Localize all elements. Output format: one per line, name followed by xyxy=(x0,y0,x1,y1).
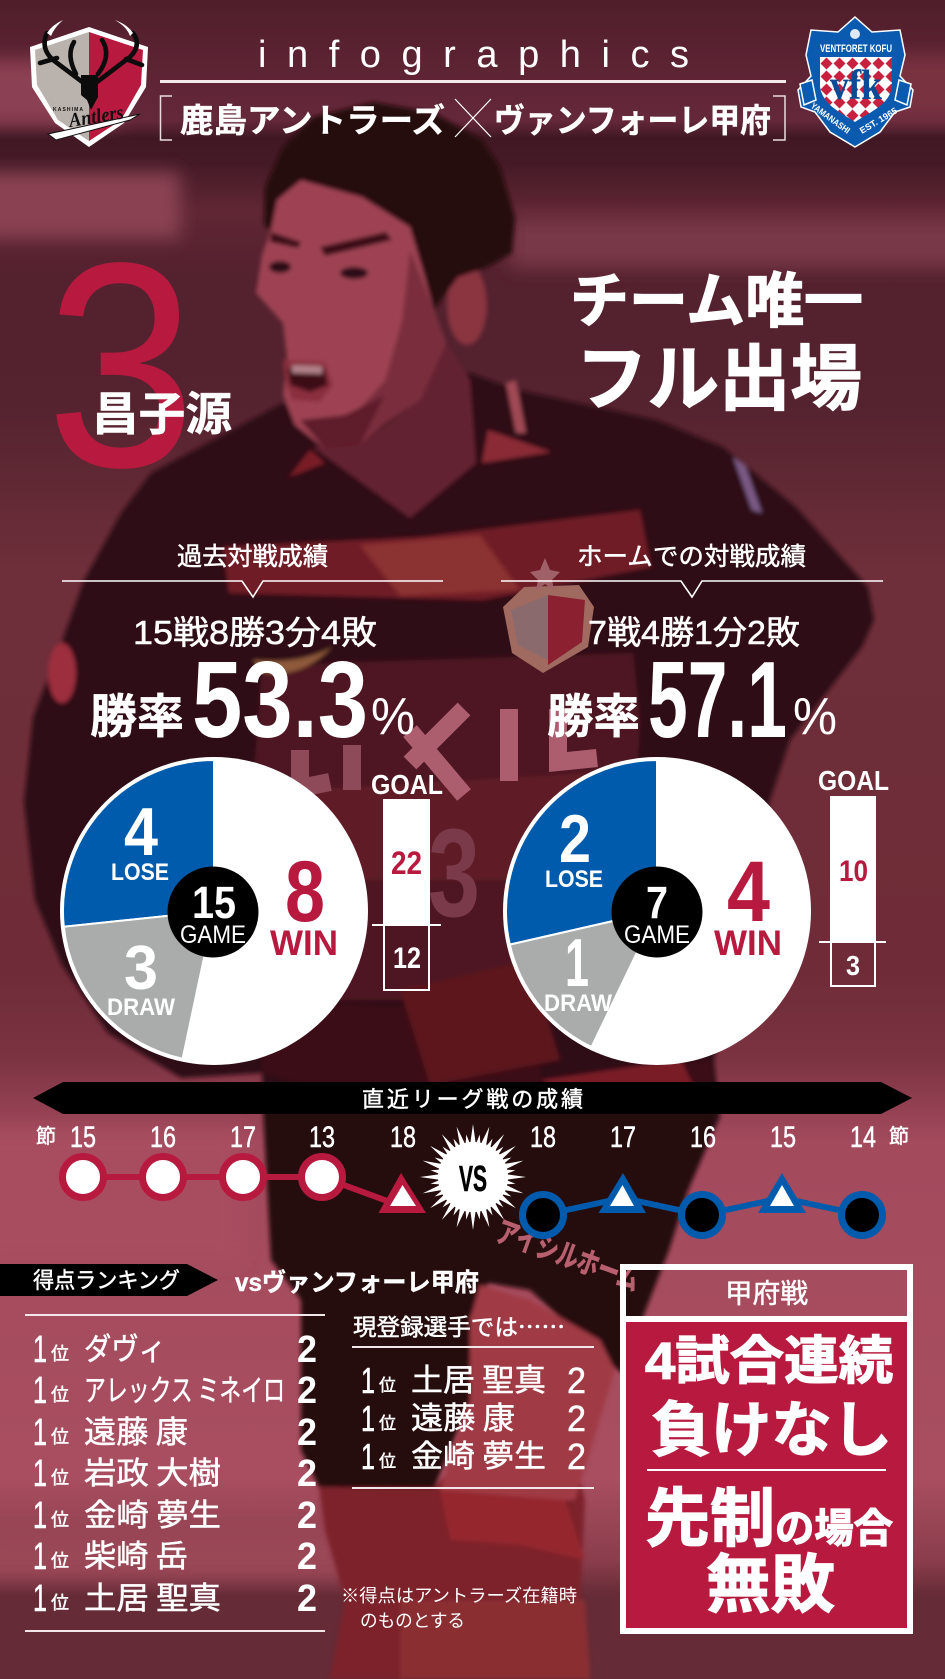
ranking table: 遠藤 康 xyxy=(84,1407,188,1452)
panel: current squad ranking xyxy=(341,1308,594,1633)
round numbers: Kofu: 14 xyxy=(850,1121,876,1154)
pie chart: 4 xyxy=(124,794,158,870)
callout stat two: 無敗 xyxy=(706,1549,835,1621)
pie chart: 15 xyxy=(192,877,236,928)
logo: Kashima Antlers crest xyxy=(30,20,148,147)
headline: フル出場 xyxy=(576,340,862,420)
win rate: 勝率 xyxy=(90,690,184,743)
player number 3: 3 xyxy=(46,202,196,528)
ranking table: ダヴィ xyxy=(84,1324,166,1369)
goal bar: 3 xyxy=(846,950,860,981)
pie chart: 4 xyxy=(727,844,770,940)
squad table: 土居 聖真 xyxy=(411,1355,546,1400)
title: infographics: infographics xyxy=(258,34,689,76)
ranking rule top xyxy=(25,1314,325,1316)
ranking table: 2 xyxy=(297,1329,317,1371)
goal bar: 10 xyxy=(839,855,868,888)
logo: Kashima Antlers crest: KASHIMA xyxy=(53,107,83,113)
goal bar: GOAL xyxy=(818,765,889,796)
callout stat two: 先制 xyxy=(645,1483,775,1555)
form banner xyxy=(33,1082,912,1114)
goal bar: GOAL xyxy=(371,769,443,800)
logo: Ventforet Kofu crest: YAMANASHI xyxy=(809,101,852,136)
footnote xyxy=(341,1582,577,1633)
round numbers: Antlers: 15 xyxy=(70,1121,96,1154)
squad table: 金崎 夢生 xyxy=(411,1431,546,1476)
squad table: 2 xyxy=(567,1436,586,1477)
Kofu results line xyxy=(522,1173,882,1236)
round numbers: Antlers: 17 xyxy=(230,1121,256,1154)
panel: all-time record xyxy=(60,537,443,1065)
win rate: 勝率 xyxy=(547,690,640,743)
squad table: 2 xyxy=(567,1398,586,1439)
round numbers: Antlers: 節 xyxy=(36,1120,56,1149)
squad table: 2 xyxy=(567,1360,586,1401)
title rule xyxy=(160,80,786,83)
squad rule bottom xyxy=(352,1487,594,1489)
pie chart: GAME xyxy=(624,921,690,949)
win rate: 53.3 xyxy=(192,639,368,761)
ranking table: 1 xyxy=(33,1370,47,1412)
record line: 7戦4勝1分2敗 xyxy=(588,614,800,651)
ranking table: 位 xyxy=(51,1468,69,1488)
headline xyxy=(570,268,863,420)
VS burst xyxy=(420,1124,526,1230)
round numbers: Kofu: 17 xyxy=(610,1121,636,1154)
footnote: ※得点はアントラーズ在籍時 xyxy=(341,1582,577,1608)
player name: 昌子源 xyxy=(92,388,232,440)
ranking table: 位 xyxy=(51,1385,69,1405)
panel: home record xyxy=(501,537,889,1065)
ranking table: 2 xyxy=(297,1578,317,1620)
round numbers: Kofu: 節 xyxy=(889,1120,909,1149)
player crest on shirt xyxy=(503,558,594,673)
ranking table: 1 xyxy=(33,1578,47,1620)
ranking table: 2 xyxy=(297,1495,317,1537)
pie chart: 8 xyxy=(285,844,325,940)
footnote: のものとする xyxy=(360,1607,465,1633)
record line: 15戦8勝3分4敗 xyxy=(133,614,377,651)
round numbers: Kofu xyxy=(530,1120,909,1154)
ranking table: 位 xyxy=(51,1593,69,1613)
round numbers: Kofu: 15 xyxy=(770,1121,796,1154)
ranking table: 2 xyxy=(297,1453,317,1495)
ranking table: 柴崎 岳 xyxy=(84,1531,188,1576)
squad table: 位 xyxy=(379,1414,396,1433)
goal bar: 22 xyxy=(391,845,422,881)
round numbers: Kofu: 18 xyxy=(530,1121,556,1154)
pie chart: 7 xyxy=(646,877,668,928)
round numbers: Antlers: 13 xyxy=(309,1121,335,1154)
ranking table: 1 xyxy=(33,1329,47,1371)
VS burst: VS xyxy=(459,1158,487,1199)
squad table: 1 xyxy=(361,1398,375,1439)
squad table: 位 xyxy=(379,1376,396,1395)
callout stat one: 負けなし xyxy=(651,1397,892,1464)
pie chart xyxy=(503,757,811,1065)
ranking table: 位 xyxy=(51,1427,69,1447)
goal bar: 12 xyxy=(393,942,421,975)
win rate xyxy=(90,639,415,761)
pie chart: LOSE xyxy=(111,859,169,886)
ranking table: アレックス ミネイロ xyxy=(84,1366,285,1410)
callout stat two: の場合 xyxy=(775,1507,893,1551)
ranking table: 1 xyxy=(33,1453,47,1495)
ranking table xyxy=(33,1324,317,1620)
section heading: 過去対戦成績 xyxy=(177,537,328,573)
ranking table: 2 xyxy=(297,1536,317,1578)
round numbers: Antlers xyxy=(36,1120,416,1154)
ranking tag xyxy=(0,1263,218,1296)
ranking rule bottom xyxy=(25,1630,325,1632)
pie chart: LOSE xyxy=(545,866,603,893)
win rate xyxy=(547,639,837,761)
logo: Ventforet Kofu crest: EST. 1965 xyxy=(858,106,899,136)
callout stat one xyxy=(645,1333,893,1464)
ranking table: 1 xyxy=(33,1412,47,1454)
squad table: 位 xyxy=(379,1452,396,1471)
pie chart: WIN xyxy=(270,924,338,963)
squad rule top xyxy=(352,1346,594,1348)
ranking table: 2 xyxy=(297,1412,317,1454)
win rate: 57.1 xyxy=(648,639,787,761)
callout stat two xyxy=(645,1483,893,1621)
round numbers: Kofu: 16 xyxy=(690,1121,716,1154)
panel: Kofu match callout xyxy=(623,1267,910,1631)
ranking table: 1 xyxy=(33,1495,47,1537)
squad table: 1 xyxy=(361,1436,375,1477)
heading rule with notch xyxy=(501,581,883,597)
heading rule with notch xyxy=(62,581,443,597)
ranking table: 土居 聖真 xyxy=(84,1573,221,1618)
pie chart: GAME xyxy=(180,921,246,949)
shorts sponsor: アイシルホーム xyxy=(492,1216,644,1298)
round numbers: Antlers: 18 xyxy=(390,1121,416,1154)
callout header: 甲府戦 xyxy=(725,1272,808,1311)
ranking table: 位 xyxy=(51,1551,69,1571)
headline: チーム唯一 xyxy=(570,268,863,335)
win rate: % xyxy=(793,688,837,746)
squad table: 1 xyxy=(361,1360,375,1401)
round numbers: Antlers: 16 xyxy=(150,1121,176,1154)
win rate: % xyxy=(371,688,415,746)
shirt sponsor letters xyxy=(300,709,597,795)
ranking table: 岩政 大樹 xyxy=(84,1448,221,1493)
logo: Ventforet Kofu crest: VENTFORET KOFU xyxy=(820,43,892,55)
panel: recent league form xyxy=(33,1082,912,1236)
match title with brackets: ヴァンフォーレ甲府 xyxy=(494,102,771,139)
pie chart: DRAW xyxy=(544,990,612,1017)
ranking table: 金崎 夢生 xyxy=(84,1490,221,1535)
logo: Kashima Antlers crest: Antlers xyxy=(66,102,125,132)
callout stat one: 4試合連続 xyxy=(645,1333,893,1391)
pie chart: 2 xyxy=(559,801,591,877)
ranking subtitle: vsヴァンフォーレ甲府 xyxy=(235,1268,479,1297)
pie chart xyxy=(60,757,368,1065)
ranking table: 2 xyxy=(297,1370,317,1412)
pie chart: DRAW xyxy=(107,994,175,1021)
form banner: 直近リーグ戦の成績 xyxy=(362,1082,583,1114)
goal bar xyxy=(371,769,443,990)
section heading: ホームでの対戦成績 xyxy=(577,537,806,573)
squad table: 遠藤 康 xyxy=(411,1393,515,1438)
shirt number: 3 xyxy=(428,804,480,943)
ranking table: 位 xyxy=(51,1510,69,1530)
goal bar xyxy=(818,765,889,986)
match title with brackets xyxy=(160,96,785,140)
ranking tag: 得点ランキング xyxy=(33,1263,180,1295)
ranking table: 1 xyxy=(33,1536,47,1578)
match title with brackets: 鹿島アントラーズ xyxy=(180,102,445,139)
ranking table: 位 xyxy=(51,1344,69,1364)
squad table xyxy=(361,1355,586,1477)
logo: Ventforet Kofu crest: vfk xyxy=(830,63,883,109)
Antlers results line xyxy=(62,1156,426,1213)
panel: goal ranking xyxy=(0,1263,479,1632)
squad subtitle: 現登録選手では…… xyxy=(353,1308,565,1342)
pie chart: 1 xyxy=(565,925,589,1001)
pie chart: WIN xyxy=(714,924,782,963)
logo: Ventforet Kofu crest xyxy=(798,17,913,147)
pie chart: 3 xyxy=(124,934,158,1003)
